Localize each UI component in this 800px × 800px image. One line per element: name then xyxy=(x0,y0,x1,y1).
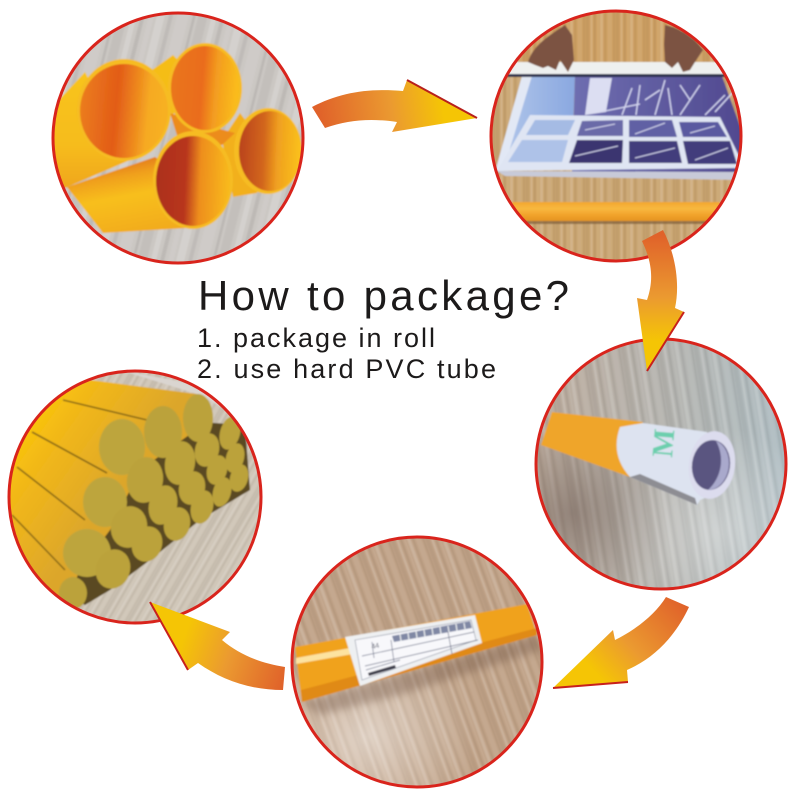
pipe: large left tube xyxy=(54,58,172,189)
white paper roll xyxy=(617,423,712,505)
poster sky area xyxy=(495,76,575,172)
text: step 2: 2. use hard PVC tube xyxy=(197,354,496,384)
tube shadow lines xyxy=(12,400,147,570)
panel: poster roll around tube photo xyxy=(530,335,792,597)
tube shadow xyxy=(302,635,542,715)
long tube bodies xyxy=(10,380,197,596)
text: step 1: 1. package in roll xyxy=(197,323,435,353)
white poster roll xyxy=(505,62,727,75)
arrow: lower right, photo 3 to photo 4 xyxy=(553,597,689,688)
barcode label xyxy=(345,615,482,686)
poster dark forest area xyxy=(572,76,745,180)
label number: 44 xyxy=(371,642,380,651)
panel: yellow PVC tube ends photo xyxy=(40,10,310,270)
teal logo letter: M xyxy=(646,428,681,459)
arrow: top, photo 1 to photo 2 xyxy=(312,80,477,132)
pipe: back top tube xyxy=(152,43,242,145)
roll opening xyxy=(690,430,736,500)
title: How to package?: How to package? xyxy=(198,272,569,319)
arrow: lower left, photo 4 to photo 5 xyxy=(150,602,285,690)
poster window frame xyxy=(497,115,745,171)
dark gap behind bundle xyxy=(60,420,250,605)
yellow tube xyxy=(512,202,720,221)
tube ends xyxy=(59,394,251,609)
pipe: back right tube xyxy=(222,108,302,197)
panel: labelled tube photo xyxy=(288,532,550,794)
panel: poster being rolled onto tube photo xyxy=(485,5,747,267)
orange tube xyxy=(541,412,643,477)
orange tube with gloss xyxy=(295,604,537,702)
hands xyxy=(528,25,703,72)
pipe: front bottom tube xyxy=(67,131,233,233)
panel: tube bundle photo xyxy=(0,368,267,630)
arrow: right, photo 2 to photo 3 xyxy=(637,230,684,371)
